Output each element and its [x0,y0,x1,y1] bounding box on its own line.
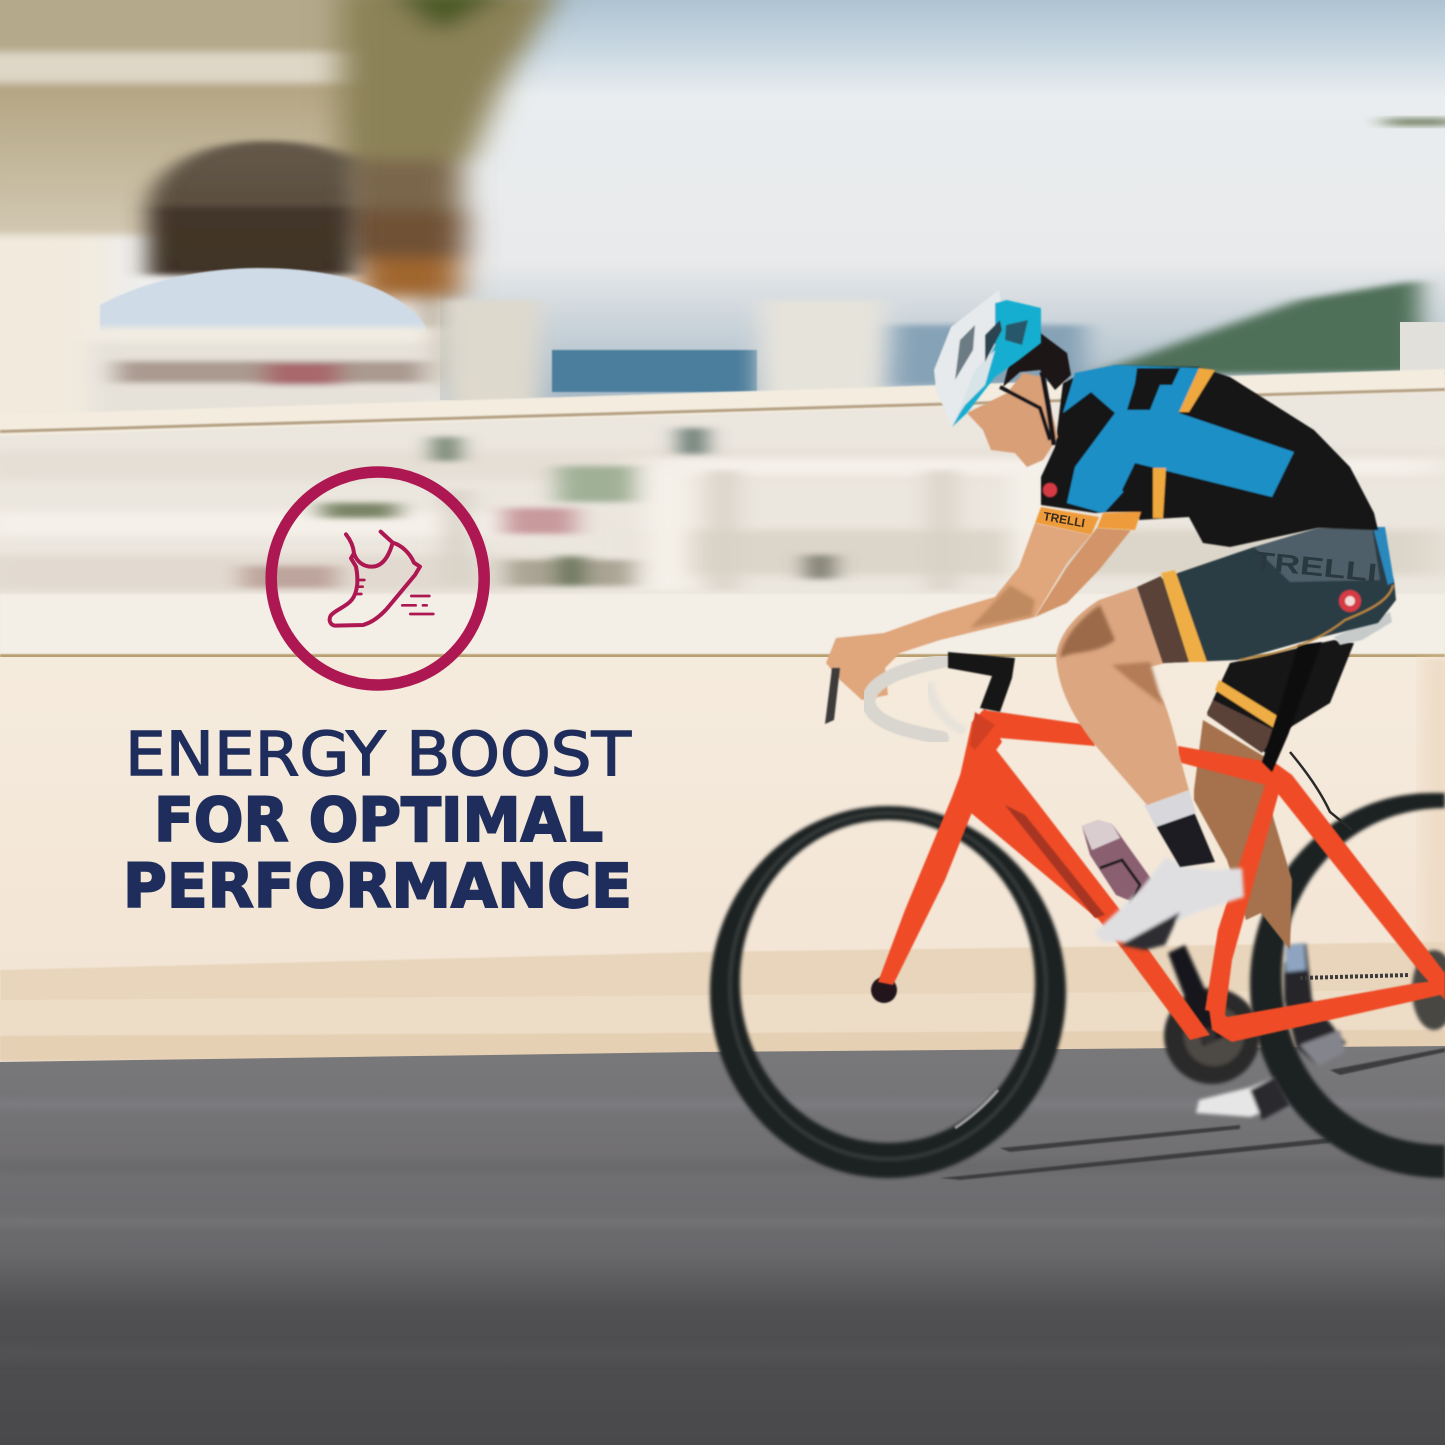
shoe outline [330,532,433,626]
heading line 3: PERFORMANCE [123,851,632,922]
icon: running shoe in circle [271,472,484,685]
forearm muscle shading [970,585,1035,628]
ledge line [0,654,1445,658]
balustrade posts and plants [0,450,1445,591]
front rim band [730,813,1046,1159]
wall right shading [1425,658,1445,958]
sky and clouds [440,0,1445,400]
fork [878,797,976,985]
rear cassette [1412,950,1445,1030]
chainring and crank [1164,945,1260,1084]
distant sea strip [552,350,757,392]
frame shadow on top [970,712,995,750]
jersey [1035,365,1378,547]
ledge [0,594,1445,656]
pavement [0,942,1445,1062]
rear wheel [1250,793,1445,1178]
far arm [1035,528,1131,617]
front wheel [710,806,1066,1178]
sleeve lettering: TRELLI [1042,509,1086,530]
top tube [972,710,1095,746]
rear foot and shoe [1196,943,1346,1120]
stem [948,652,1015,712]
knee shading [1060,605,1115,658]
distant blue haze [895,325,1085,385]
handlebar far tape [930,682,965,732]
balustrade wall [0,375,1445,670]
laces [357,580,364,594]
front shoe [1094,857,1244,950]
head tube [958,708,1002,785]
road [0,1046,1445,1445]
heading line 1: ENERGY BOOST [125,719,632,790]
rear leg [1194,720,1292,950]
balustrade behind arch [90,300,540,415]
front rim highlight [955,1090,998,1128]
water bottle [1082,820,1152,905]
front hub [871,977,897,1003]
distant green trees [1090,280,1420,375]
saddle [1334,612,1392,645]
road motion streaks [0,1100,1445,1361]
circle ring [271,472,484,685]
far right pillar [1400,322,1445,372]
near arm [826,523,1091,700]
chain stay [1207,980,1445,1042]
speed lines [402,596,433,614]
brake lever [825,668,840,724]
lower wall [0,657,1445,977]
frame lettering band [1005,805,1105,918]
palm frond top right [1385,118,1445,126]
heading [123,719,632,922]
railing [0,369,1445,436]
road shadows [940,1048,1445,1180]
distant white tower [760,300,885,395]
railing shadow line [0,388,1445,433]
handlebar tape [868,660,948,738]
shorts lettering: TRELLI [1251,545,1379,588]
front leg [1056,587,1189,805]
head [967,332,1071,467]
rear cable [1290,752,1352,830]
pavement band [0,990,1445,1036]
seat stay [1274,762,1445,1000]
heading line 2: FOR OPTIMAL [154,785,603,856]
seat tube [1205,785,1281,1015]
thigh underside shading [1112,662,1163,705]
chain [1300,975,1410,978]
cyclist and bicycle [710,290,1445,1178]
kerb [0,1030,1445,1060]
seat post [1262,642,1322,772]
down tube [952,747,1210,1040]
pale arch opening [100,268,425,332]
rear shorts [1207,640,1354,753]
front sock [1144,790,1215,867]
cycling shorts [1137,527,1396,663]
archway [148,141,355,275]
helmet [934,290,1041,427]
palm and hanging planter [340,0,560,385]
bike frame [878,708,1445,1042]
building facade [0,0,500,420]
top tube rear [1178,746,1290,788]
